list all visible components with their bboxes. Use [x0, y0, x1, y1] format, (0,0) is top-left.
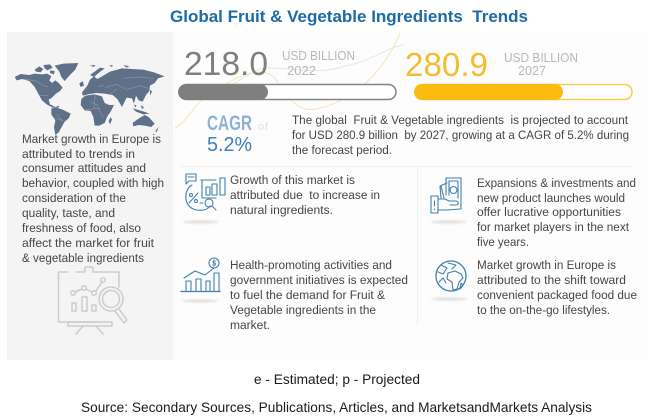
text: health-promoting: Vegetable ingredients in the	[230, 303, 376, 317]
text block: Europe trends	[22, 132, 164, 265]
text: expansions	[477, 176, 636, 249]
footnote: estimated and projected: e - Estimated; p - Projected	[254, 371, 420, 387]
stat: 2027 market size	[405, 47, 578, 84]
insight: health-promoting activities	[181, 258, 408, 332]
text: expansions: offer lucrative opportunities	[477, 205, 621, 219]
text: health-promoting: Health-promoting activities and	[230, 258, 392, 272]
icon: presentation board with magnifier	[58, 267, 127, 334]
progress bar: 2022	[178, 84, 396, 100]
text block: forecast summary: The global Fruit & Vegetable ingredients is projected to account	[292, 113, 629, 127]
text: expansions: for market players in the next	[477, 220, 630, 234]
icon: globe	[436, 261, 466, 291]
text block: Europe trends: attributed to trends in	[22, 147, 135, 161]
stat: 2027 market size: 2027	[518, 64, 546, 78]
icon shadow	[182, 300, 218, 302]
text: natural ingredients: attributed due to increase in	[230, 188, 380, 202]
text: convenient food	[477, 258, 637, 317]
source line: Source: Secondary Sources, Publications, Articles, and MarketsandMarkets Analysis	[81, 399, 592, 415]
text: natural ingredients	[230, 173, 380, 217]
icon: analytics chart	[186, 174, 225, 210]
text: health-promoting: to fuel the demand for Fruit &	[230, 288, 386, 302]
text: expansions: new product launches would	[477, 191, 625, 205]
text: natural ingredients: natural ingredients.	[230, 203, 333, 217]
text: convenient food: attributed to the shift toward	[477, 273, 626, 287]
stat: 2022 market size	[184, 46, 355, 83]
stat: 2027 market size: USD BILLION	[504, 51, 578, 65]
progress bar: 2027	[414, 84, 632, 100]
icon shadow	[183, 220, 219, 224]
text: convenient food: Market growth in Europe is	[477, 258, 616, 272]
text: health-promoting: market.	[230, 318, 270, 332]
decorative curves	[175, 33, 403, 128]
text: health-promoting	[230, 258, 408, 332]
stat: 2022 market size: 2022	[287, 64, 316, 78]
text: health-promoting: government initiatives is expected	[230, 273, 408, 287]
text: natural ingredients: Growth of this market is	[230, 173, 355, 187]
stat: 2022 market size: USD BILLION	[282, 49, 355, 63]
icon: hand holding money	[431, 178, 461, 213]
text block: forecast summary	[292, 113, 629, 157]
icon: world map	[15, 63, 165, 135]
stat: 2027 market size: 280.9	[405, 47, 488, 84]
text: convenient food: convenient packaged food due	[477, 288, 637, 302]
text block: forecast summary: the forecast period.	[292, 143, 392, 157]
icon: growth bars with dollar	[181, 258, 220, 292]
text block: Europe trends: Market growth in Europe is	[22, 132, 161, 146]
CAGR callout: of	[258, 121, 269, 133]
icon shadow	[431, 298, 467, 300]
text block: Europe trends: behavior, coupled with high	[22, 176, 164, 190]
insight: expansions and investments	[431, 176, 636, 249]
text block: Europe trends: quality, taste, and	[22, 206, 115, 220]
text block: Europe trends: affect the market for fruit	[22, 236, 155, 250]
icon shadow	[431, 220, 467, 224]
text: expansions: five years.	[477, 235, 529, 249]
CAGR callout: CAGR	[207, 112, 252, 135]
insight: natural ingredients	[183, 173, 380, 224]
text block: Europe trends: consideration of the	[22, 191, 126, 205]
main panel	[7, 32, 649, 360]
title: Global Fruit & Vegetable Ingredients Trends	[170, 8, 528, 26]
text block: Europe trends: consumer attitudes and	[22, 161, 146, 175]
CAGR callout: 5.2%	[207, 133, 252, 156]
text block: forecast summary: for USD 280.9 billion by 2027, growing at a CAGR of 5.2% during	[292, 128, 629, 142]
text block: Europe trends: & vegetable ingredients	[22, 251, 144, 265]
CAGR callout	[207, 112, 269, 156]
text block: Europe trends: freshness of food, also	[22, 221, 141, 235]
panel: left sidebar	[7, 32, 173, 360]
text: expansions: Expansions & investments and	[477, 176, 636, 190]
stat: 2022 market size: 218.0	[184, 46, 268, 83]
insight: convenient packaged food	[431, 258, 637, 317]
text: convenient food: to the on-the-go lifestyles.	[477, 303, 610, 317]
